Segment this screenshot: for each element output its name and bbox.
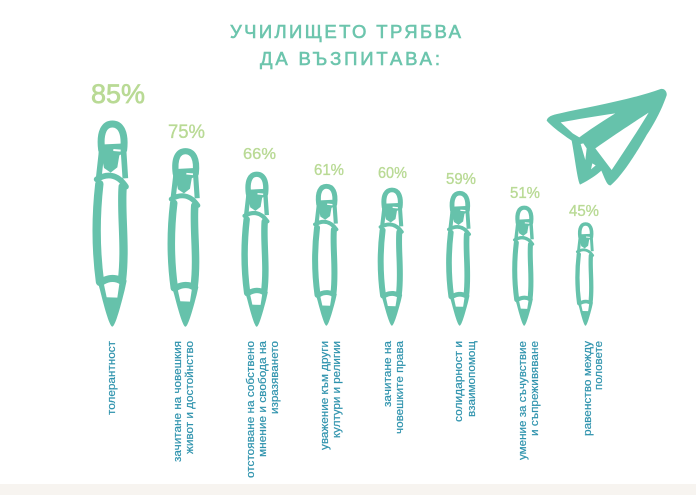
pencil 61%: уважение към други култури и религии [314,162,344,450]
pencil 51%: умение за съчувствие и съпреживяване: умение за съчувствие [517,341,529,460]
title: УЧИЛИЩЕТО ТРЯБВА [230,21,462,42]
value: 85%: 85% [91,79,145,109]
title [230,21,462,69]
pencil 75%: зачитане на човешкия живот и достойнство: зачитане на човешкия [172,341,184,462]
value: 66%: 66% [243,146,276,163]
pencil 75%: зачитане на човешкия живот и достойнство [168,122,205,462]
value: 61%: 61% [314,162,344,179]
pencil 51%: умение за съчувствие и съпреживяване: и съпреживяване [529,341,541,436]
pencil 66%: отстояване на собствено мнение [243,146,281,478]
pencil 60%: зачитане на човешките права [378,165,407,434]
pencil 85%: толерантност [91,79,145,415]
pencil 85%: толерантност: толерантност [106,341,118,415]
pencil 59%: солидарност и взаимопомощ [446,171,478,422]
pencil 51%: умение за съчувствие и съпреживяване [510,185,541,460]
pencil 75%: зачитане на човешкия живот и достойнство: живот и достойнство [184,341,196,454]
pencil 66%: отстояване на собствено мнение: отстояване на собствено [245,341,257,478]
pencil 60%: зачитане на човешките права: зачитане на [382,340,394,407]
value: 75%: 75% [168,122,205,143]
icon: paper plane [547,89,667,185]
pencil 45%: равенство между половете: равенство между [582,340,594,436]
value: 59%: 59% [446,171,476,188]
bottom band [0,484,696,495]
pencil 59%: солидарност и взаимопомощ: солидарност и [453,341,465,422]
value: 60%: 60% [378,165,407,182]
title: ДА ВЪЗПИТАВА: [260,48,440,69]
pencil 45%: равенство между половете: половете [593,341,605,390]
pencil 66%: отстояване на собствено мнение: изразяването [269,341,281,414]
pencil 61%: уважение към други култури и религии: уважение към други [319,341,331,450]
pencil 45%: равенство между половете [569,203,605,436]
value: 45%: 45% [569,203,599,220]
pencil 66%: отстояване на собствено мнение: мнение и свобода на [257,340,269,457]
pencil 59%: солидарност и взаимопомощ: взаимопомощ [466,341,478,417]
value: 51%: 51% [510,185,540,202]
pencil 61%: уважение към други култури и религии: култури и религии [331,341,343,438]
pencil 60%: зачитане на човешките права: човешките права [394,340,406,434]
